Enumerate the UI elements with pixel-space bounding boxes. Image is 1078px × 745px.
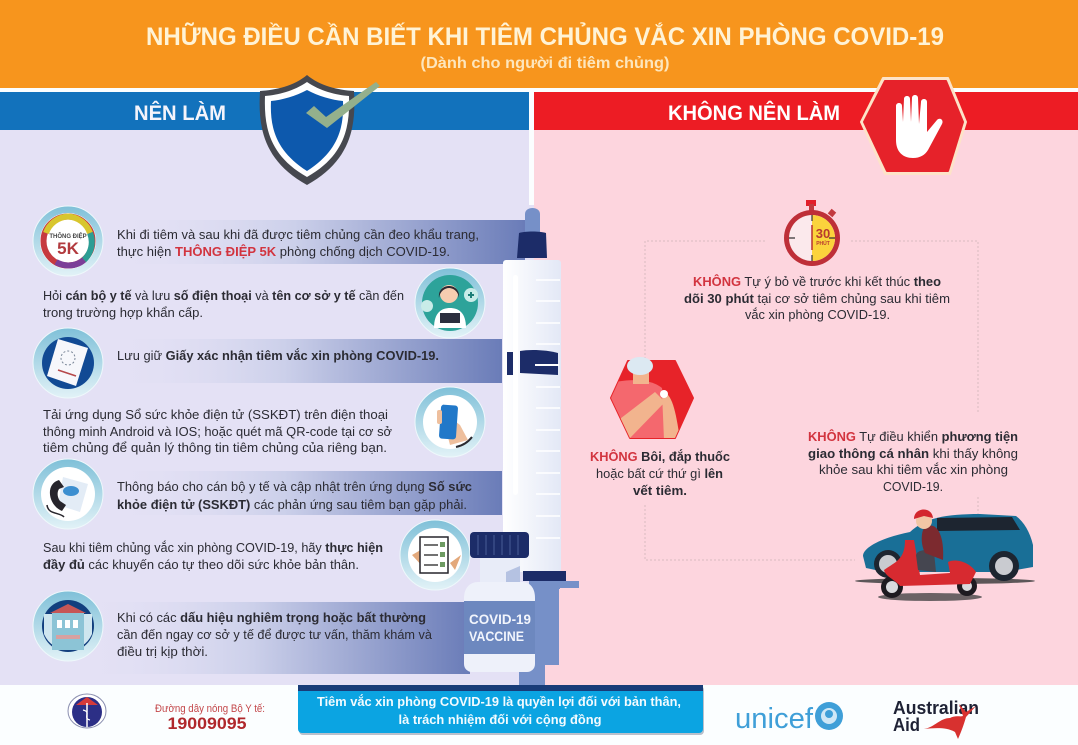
icon: hospital — [33, 591, 103, 661]
item 4: health app: thông minh Android và IOS; hoặc quét mã QR-code tại cơ sở — [43, 424, 392, 439]
text: KHÔNG Bôi, đắp thuốc — [590, 449, 730, 464]
footer: australian aid logo: Aid — [893, 715, 920, 735]
text: Khi có các dấu hiệu nghiêm trọng hoặc bất thường — [117, 610, 426, 625]
item 4: health app: tiêm chủng để quản lý thông tin tiêm chủng của riêng bạn. — [43, 440, 387, 455]
don't 1: leaving early: vắc xin phòng COVID-19. — [745, 307, 890, 322]
text: Lưu giữ Giấy xác nhận tiêm vắc xin phòng COVID-19. — [117, 348, 439, 363]
don't 1: leaving early: dõi 30 phút tại cơ sở tiêm chủng sau khi tiêm — [684, 291, 950, 306]
icon: arm with bandage — [605, 357, 693, 440]
dashed frame — [645, 241, 978, 560]
icon: car and scooter — [855, 509, 1035, 601]
don't 3: driving: giao thông cá nhân khi thấy không — [808, 446, 1018, 461]
icon: 5K: THÔNG ĐIỆP — [49, 232, 87, 240]
text: Hỏi cán bộ y tế và lưu số điện thoại và tên cơ sở y tế cần đến — [43, 288, 404, 303]
item 3: keep certificate — [33, 328, 439, 398]
header banner — [0, 0, 1078, 88]
text: Khi đi tiêm và sau khi đã được tiêm chủng cần đeo khẩu trang, — [117, 227, 479, 242]
don't 3: driving: khỏe sau khi tiêm vắc xin phòng — [819, 462, 1008, 477]
footer: hotline: Đường dây nóng Bộ Y tế: — [155, 703, 265, 715]
panel heading: should do: NÊN LÀM — [134, 101, 226, 125]
footer: unicef logo: unicef — [735, 703, 814, 735]
icon: stopwatch 30 minutes: PHÚT — [816, 240, 830, 247]
vaccine vial: VACCINE — [469, 628, 524, 644]
vaccine vial — [464, 532, 535, 672]
don't 2: applying on injection site: hoặc bất cứ thứ gì lên — [596, 466, 723, 481]
footer: unicef logo — [735, 702, 843, 735]
don't 3: driving — [808, 429, 1035, 601]
footer: australian aid logo — [893, 698, 979, 739]
gradient bands — [75, 220, 525, 674]
icon: stop hand — [861, 78, 966, 174]
text: Tải ứng dụng Sổ sức khỏe điện tử (SSKĐT) trên điện thoại — [43, 407, 388, 422]
item 2: ask health staff: trong trường hợp khẩn cấp. — [43, 305, 203, 320]
item 4: health app — [43, 387, 485, 457]
text: KHÔNG Tự ý bỏ về trước khi kết thúc theo — [693, 274, 941, 289]
icon: doctor — [415, 268, 485, 338]
icon: certificate — [33, 328, 103, 398]
footer: ministry of health logo — [68, 694, 106, 728]
icon: shield with check — [260, 75, 380, 185]
item 1: 5K message — [33, 206, 479, 276]
item 7: seek medical care — [33, 591, 433, 661]
item 2: ask health staff — [43, 268, 485, 338]
icon: telephone and report — [33, 459, 103, 529]
text: Thông báo cho cán bộ y tế và cập nhật trên ứng dụng Số sức — [117, 479, 472, 494]
syringe — [503, 208, 579, 685]
icon: phone — [415, 387, 485, 457]
don't 2: applying on injection site — [590, 357, 730, 498]
item 1: 5K message: thực hiện THÔNG ĐIỆP 5K phòng chống dịch COVID-19. — [117, 244, 450, 259]
title: NHỮNG ĐIỀU CẦN BIẾT KHI TIÊM CHỦNG VẮC XIN PHÒNG COVID-19 — [146, 21, 944, 51]
subtitle: (Dành cho người đi tiêm chủng) — [420, 55, 670, 72]
footer: callout — [298, 685, 704, 735]
footer: callout: Tiêm vắc xin phòng COVID-19 là quyền lợi đối với bản thân, — [317, 694, 681, 709]
text: KHÔNG Tự điều khiển phương tiện — [808, 429, 1018, 444]
icon: stopwatch 30 minutes — [784, 200, 840, 266]
item 5: report reactions: khỏe điện tử (SSKĐT) các phản ứng sau tiêm bạn gặp phải. — [117, 497, 467, 512]
footer: hotline — [155, 703, 265, 733]
panel heading: should not do: KHÔNG NÊN LÀM — [668, 101, 840, 125]
item 6: self monitoring: đầy đủ các khuyến cáo tự theo dõi sức khỏe bản thân. — [43, 557, 359, 572]
don't 2: applying on injection site: vết tiêm. — [633, 483, 687, 498]
don't 3: driving: COVID-19. — [883, 479, 943, 494]
icon: checklist — [400, 520, 470, 590]
text: Sau khi tiêm chủng vắc xin phòng COVID-19, hãy thực hiện — [43, 540, 383, 555]
item 5: report reactions — [33, 459, 472, 529]
item 6: self monitoring — [43, 520, 470, 590]
icon: 5K: 5K — [57, 239, 80, 258]
panel heading: should do — [0, 92, 529, 130]
don't 1: leaving early — [684, 200, 950, 322]
footer: callout: là trách nhiệm đối với cộng đồng — [398, 712, 602, 727]
icon: 5K — [33, 206, 103, 276]
footer: hotline: 19009095 — [168, 714, 246, 733]
icon: stopwatch 30 minutes: 30 — [816, 226, 830, 241]
panel heading: should not do — [534, 92, 1078, 130]
item 7: seek medical care: cần đến ngay cơ sở y tế để được tư vấn, thăm khám và — [117, 627, 433, 642]
vial label: COVID-19 — [469, 611, 531, 627]
footer: australian aid logo: Australian — [893, 698, 979, 718]
item 7: seek medical care: điều trị kịp thời. — [117, 644, 208, 659]
